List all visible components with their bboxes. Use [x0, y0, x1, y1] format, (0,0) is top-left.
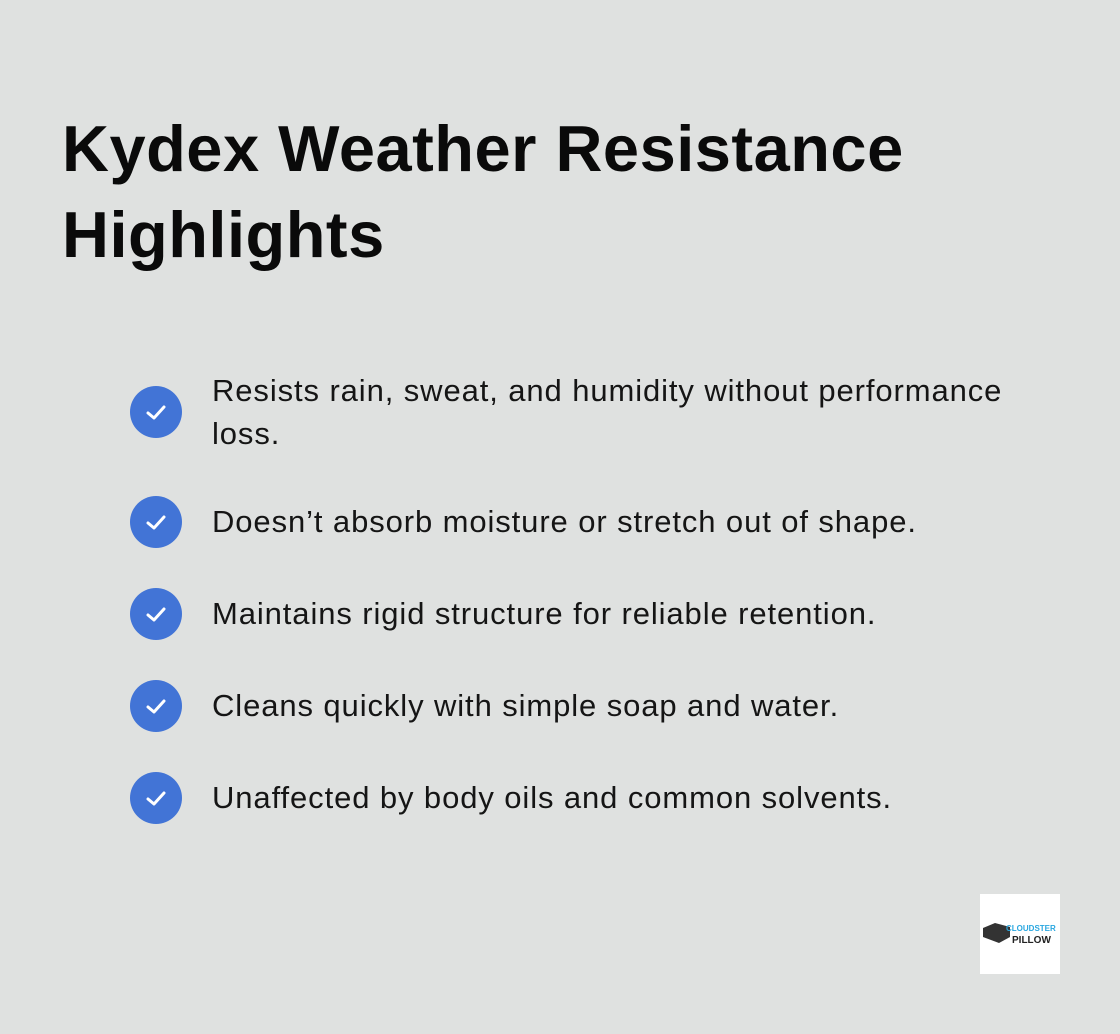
icon: check	[130, 588, 182, 640]
text: Resists rain, sweat, and humidity without performance	[212, 373, 1002, 408]
item 2	[130, 496, 917, 548]
icon: check	[130, 386, 182, 438]
title: Highlights	[62, 198, 385, 271]
icon: check	[130, 680, 182, 732]
logo: PILLOW	[1012, 935, 1051, 946]
logo: CLOUDSTER	[1006, 924, 1056, 933]
text: Maintains rigid structure for reliable retention.	[212, 596, 876, 631]
icon: check	[130, 496, 182, 548]
icon: check	[130, 772, 182, 824]
item 4	[130, 680, 839, 732]
item 5	[130, 772, 892, 824]
text: Doesn’t absorb moisture or stretch out of shape.	[212, 504, 917, 539]
item 1	[130, 373, 1002, 451]
title	[62, 112, 904, 271]
title: Kydex Weather Resistance	[62, 112, 904, 185]
logo	[980, 894, 1060, 974]
item 3	[130, 588, 876, 640]
text: Cleans quickly with simple soap and water.	[212, 688, 839, 723]
text	[212, 373, 1002, 451]
text: loss.	[212, 416, 280, 451]
text: Unaffected by body oils and common solvents.	[212, 780, 892, 815]
